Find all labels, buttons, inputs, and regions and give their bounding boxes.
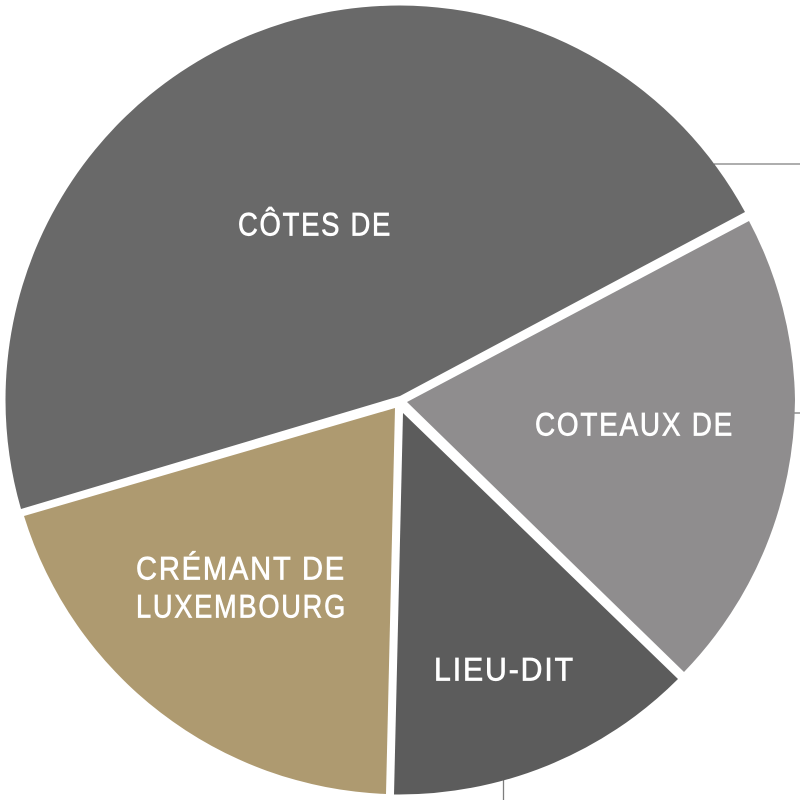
- leader line: top right: [714, 163, 800, 165]
- label: Crémant de Luxembourg: CRÉMANT DE: [136, 550, 346, 586]
- label: Coteaux de: COTEAUX DE: [535, 406, 734, 442]
- label: Côtes de: CÔTES DE: [238, 206, 392, 242]
- slice: Lieu-dit: [394, 413, 678, 795]
- label: Lieu-dit: LIEU-DIT: [434, 652, 575, 688]
- label: Crémant de Luxembourg: LUXEMBOURG: [136, 588, 347, 624]
- leader line: bottom: [502, 780, 504, 800]
- leader line: right: [794, 412, 800, 414]
- slice: Coteaux de: [407, 221, 795, 672]
- slice: Crémant de Luxembourg: [24, 408, 395, 794]
